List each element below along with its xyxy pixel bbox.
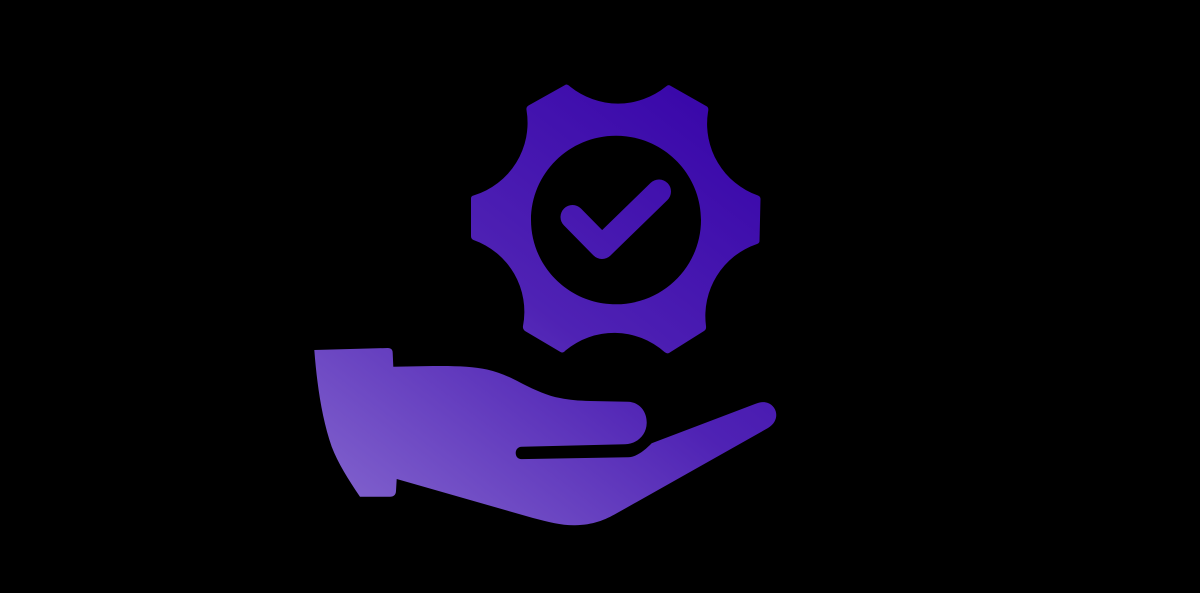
icon: open hand (314, 348, 776, 525)
gear body with circular cut-out (471, 84, 760, 353)
icon: gear with check mark (471, 84, 760, 353)
check mark (572, 192, 659, 247)
